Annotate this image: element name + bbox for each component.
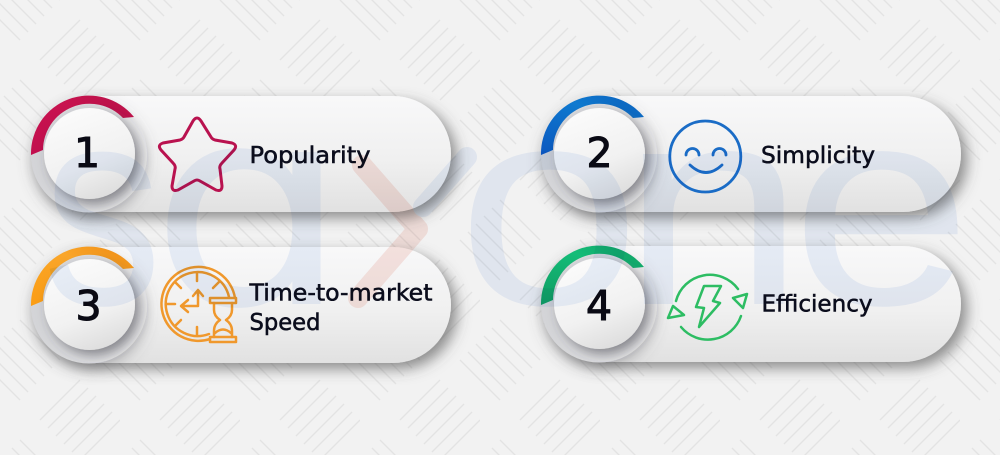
watermark logo [43, 46, 972, 370]
watermark logo: e [791, 48, 972, 365]
label: Simplicity: Simplicity [761, 141, 875, 169]
label: Popularity: Popularity [250, 141, 371, 169]
icon: energy cycle [668, 275, 747, 340]
number 3: 3 [75, 282, 102, 330]
icon: clock and hourglass [161, 267, 236, 342]
number 4: 4 [586, 282, 612, 330]
panel: efficiency [541, 246, 961, 362]
label: Time-to-market Speed [248, 278, 432, 336]
label: Time-to-market Speed: Time-to-market [248, 278, 432, 306]
panel: time-to-market speed [31, 247, 451, 364]
icon: star [159, 118, 236, 190]
watermark logo: n [621, 48, 805, 365]
watermark logo: s [43, 48, 162, 365]
number 2: 2 [586, 129, 613, 177]
label: Time-to-market Speed: Speed [250, 308, 320, 336]
panel: simplicity [541, 96, 961, 212]
label: Efficiency: Efficiency [762, 290, 873, 318]
watermark logo: ɑ [150, 46, 349, 370]
watermark logo: o [457, 48, 641, 365]
icon: smiling face [670, 121, 741, 192]
number 1: 1 [74, 129, 100, 177]
panel: popularity [31, 96, 451, 212]
